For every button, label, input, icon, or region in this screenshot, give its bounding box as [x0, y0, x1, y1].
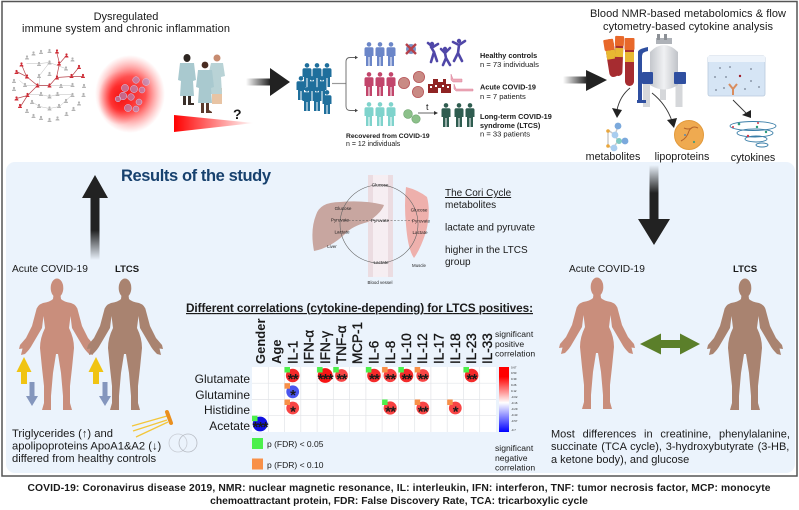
significance stars: ** — [369, 371, 380, 388]
diagram: Cori cycle: Glucose — [411, 208, 428, 212]
labels: right bodies: LTCS — [733, 264, 757, 275]
legend: colour bar — [499, 366, 518, 432]
legend: colour bar: 0.39 — [511, 377, 517, 381]
legend: colour bar: 0.26 — [511, 383, 517, 387]
question mark: ? — [233, 106, 242, 122]
significance stars: ** — [385, 371, 396, 388]
legend: FDR 0.10 — [252, 458, 324, 470]
column labels: IL-23 — [464, 333, 479, 364]
footer abbreviations: COVID-19: Coronavirus disease 2019, NMR: nuclear magnetic resonance, IL: interleukin, IFN: interferon, TNF: tumor necrosis factor, MCP: monocyte — [28, 483, 771, 494]
significance stars: ** — [401, 371, 412, 388]
diagram: Cori cycle — [312, 175, 431, 285]
text: cohort labels: Recovered from COVID-19 — [346, 133, 430, 140]
legend: colour bar: 0.67 — [511, 366, 517, 370]
icon: cytokine storm — [730, 122, 776, 147]
arrows: cohort split bracket — [332, 56, 358, 112]
labels: analysis outputs: lipoproteins — [655, 151, 709, 163]
icon: lipoprotein particle — [674, 120, 704, 150]
row labels: Glutamine — [195, 388, 250, 402]
significance stars: ** — [467, 371, 478, 388]
figure: LTCS body, left — [87, 278, 163, 410]
column labels: IL-1 — [286, 341, 300, 364]
significance stars: * — [290, 387, 296, 404]
column labels — [253, 318, 495, 364]
legend: significant positive: correlation — [495, 348, 535, 358]
icon: immune network — [12, 49, 86, 122]
significance stars: ** — [418, 404, 429, 420]
column labels: Gender — [253, 318, 268, 364]
chart: correlation heatmap — [195, 318, 496, 436]
row labels: Glutamate — [195, 372, 250, 386]
group: healthy controls icons — [364, 39, 465, 66]
icon: flow cytometry well — [708, 56, 765, 96]
diagram: Cori cycle: Pyruvate — [331, 218, 350, 222]
arrow: to cohort — [246, 68, 290, 96]
legend: colour bar: -0.7 — [511, 428, 516, 432]
text: Cori cycle notes: group — [445, 257, 471, 268]
text: cohort labels: Long-term COVID-19 — [480, 112, 552, 121]
text: triglycerides: differed from healthy controls — [12, 453, 156, 465]
labels: left bodies: LTCS — [115, 264, 139, 275]
icon: blood tubes — [603, 36, 634, 86]
liver — [312, 201, 384, 251]
significance stars: ** — [385, 404, 396, 420]
icon: lipoprotein sticks and loops — [132, 412, 197, 452]
correlation circles — [253, 368, 478, 431]
diagram: Cori cycle: Blood vessel — [368, 280, 392, 285]
heading: dysregulated immune system: Dysregulated — [94, 11, 158, 23]
arrows: yellow up, blue down — [16, 357, 111, 406]
arrow: up to results — [82, 175, 108, 260]
significance stars — [253, 371, 478, 436]
column labels: IL-17 — [432, 333, 446, 364]
text: cohort labels: syndrome (LTCS) — [480, 121, 541, 130]
labels: left bodies: Acute COVID-19 — [12, 264, 88, 275]
diagram: Cori cycle: Lactate — [334, 230, 350, 234]
text: most differences — [551, 428, 790, 466]
text: most differences: a ketone body), and glucose — [551, 454, 689, 466]
column labels: MCP-1 — [350, 322, 365, 364]
icon: patients in gowns — [178, 54, 225, 113]
FDR corner markers — [252, 367, 469, 421]
legend: significant negative: negative — [495, 453, 528, 463]
heading: blood NMR analysis: Blood NMR-based metabolomics & flow — [590, 8, 786, 20]
row labels — [195, 372, 250, 433]
diagram: Cori cycle: Glucose — [335, 206, 352, 211]
text: triglycerides — [12, 428, 162, 465]
panel: results of the study — [6, 162, 795, 473]
text: Cori cycle notes — [445, 188, 535, 268]
text: cohort labels — [346, 51, 552, 148]
significance stars: ** — [288, 371, 299, 388]
text: Cori cycle notes: The Cori Cycle — [445, 188, 512, 199]
diagram: Cori cycle: Glucose — [372, 182, 389, 188]
footer abbreviations: chemoattractant protein, FDR: False Discovery Rate, TCA: tricarboxylic cycle — [210, 496, 588, 507]
icon: inflammation with immune cells — [95, 55, 165, 133]
diagram: Cori cycle: Lactate — [373, 260, 389, 265]
text: most differences: Most differences in creatinine, phenylalanine, — [551, 428, 790, 440]
icon: red severity wedge — [174, 115, 254, 132]
group: acute COVID icons — [364, 71, 473, 98]
labels: analysis outputs: metabolites — [586, 151, 640, 163]
text: triglycerides: Triglycerides (↑) and — [12, 428, 113, 440]
significance stars: *** — [318, 371, 334, 388]
heading: correlations: Different correlations (cytokine-depending) for LTCS positives: — [186, 301, 533, 315]
legend: significant negative: significant — [495, 443, 534, 453]
legend: colour bar: 0.12 — [511, 389, 517, 393]
legend: significant negative — [495, 443, 535, 472]
text: Cori cycle notes: lactate and pyruvate — [445, 222, 535, 234]
labels: analysis outputs: cytokines — [731, 152, 775, 164]
arrow: green double — [640, 334, 700, 354]
legend: significant positive — [495, 329, 535, 358]
column labels: IL-8 — [383, 341, 398, 364]
legend: colour bar: -0.29 — [511, 407, 518, 411]
text: cohort labels: Healthy controls — [480, 51, 537, 60]
labels: right bodies — [569, 264, 757, 275]
legend: significant positive: significant — [495, 329, 534, 339]
legend: colour bar: -0.02 — [511, 395, 518, 399]
heading: results of the study: Results of the study — [121, 167, 272, 185]
column labels: TNF-α — [334, 325, 349, 364]
diagram: Cori cycle: Muscle — [412, 263, 427, 268]
figure: acute COVID body, right — [559, 278, 635, 409]
text: cohort labels: n = 73 individuals — [480, 60, 539, 69]
text: cohort labels: Acute COVID-19 — [480, 82, 536, 92]
legend: colour bar: 0.53 — [511, 371, 517, 375]
figure: LTCS body, right — [707, 278, 783, 410]
muscle — [405, 187, 429, 258]
column labels: IL-6 — [366, 341, 382, 364]
text: Cori cycle notes: metabolites — [445, 200, 496, 211]
column labels: IFN-α — [302, 330, 316, 364]
icon: NMR spectrometer — [637, 34, 686, 107]
arrow: down from analysis — [638, 165, 670, 245]
significance stars: * — [453, 404, 459, 420]
text: cohort labels: n = 33 patients — [480, 130, 530, 138]
arrows: to metabolites, lipoproteins, cytokines — [612, 88, 751, 128]
diagram: Cori cycle: Pyruvate — [412, 218, 431, 224]
legend: FDR 0.10: p (FDR) < 0.10 — [267, 460, 324, 470]
column labels: Age — [269, 339, 284, 364]
group: long-term COVID icons — [364, 102, 474, 127]
column labels: IL-10 — [399, 333, 414, 364]
labels: right bodies: Acute COVID-19 — [569, 264, 645, 275]
legend: colour bar: -0.57 — [511, 419, 518, 423]
column labels: IL-18 — [448, 333, 463, 364]
label: t: t — [426, 102, 429, 112]
text: cohort labels: n = 7 patients — [480, 92, 526, 101]
legend: significant negative: correlation — [495, 462, 535, 472]
heading: dysregulated immune system — [22, 11, 230, 35]
row labels: Histidine — [204, 403, 250, 417]
significance stars: * — [290, 404, 296, 420]
text: most differences: succinate (TCA cycle), 3-hydroxybutyrate (3-HB, — [551, 441, 789, 453]
icon: metabolites molecule — [606, 123, 628, 151]
blood vessel — [368, 175, 393, 277]
labels: left bodies — [12, 264, 139, 275]
heading: blood NMR analysis: cytometry-based cytokine analysis — [603, 21, 774, 33]
heading: blood NMR analysis — [590, 8, 786, 33]
column labels: IFN-γ — [318, 331, 333, 364]
diagram: Cori cycle: Pyruvate — [371, 218, 390, 223]
footer abbreviations — [28, 483, 771, 507]
legend: colour bar: -0.43 — [511, 413, 518, 417]
labels: analysis outputs — [586, 151, 775, 164]
figure: acute COVID body, left — [19, 278, 95, 410]
text: Cori cycle notes: higher in the LTCS — [445, 245, 528, 256]
significance stars: *** — [253, 419, 269, 436]
text: cohort labels: n = 12 individuals — [346, 141, 401, 148]
legend: colour bar: -0.16 — [511, 401, 518, 405]
column labels: IL-12 — [415, 333, 430, 364]
text: triglycerides: apolipoproteins ApoA1&A2 (↓) — [12, 440, 162, 452]
column labels: IL-33 — [480, 333, 495, 364]
significance stars: ** — [336, 371, 347, 388]
icon: cohort group — [296, 63, 332, 114]
diagram: Cori cycle: Lactate — [412, 230, 428, 235]
row labels: Acetate — [209, 419, 250, 433]
significance stars: ** — [418, 371, 429, 388]
diagram: Cori cycle: Liver — [327, 244, 337, 249]
arrow: to analysis — [563, 70, 607, 91]
legend: significant positive: positive — [495, 339, 524, 349]
legend: FDR 0.05: p (FDR) < 0.05 — [267, 439, 324, 449]
heading: dysregulated immune system: immune system and chronic inflammation — [22, 23, 230, 35]
